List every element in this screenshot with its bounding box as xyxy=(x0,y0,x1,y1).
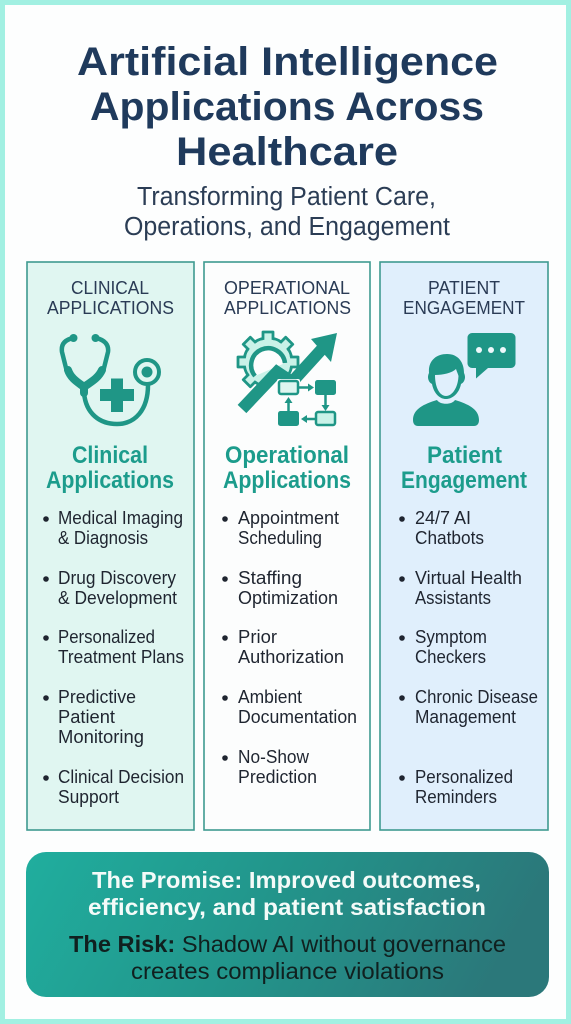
list: patient engagement items: Chatbots xyxy=(415,528,484,548)
subheading: clinical applications xyxy=(46,442,174,494)
panel header: operational: OPERATIONAL xyxy=(224,278,350,298)
panel header: operational xyxy=(224,278,351,318)
callout text: the risk: creates compliance violations xyxy=(131,958,444,984)
panel header: clinical: APPLICATIONS xyxy=(47,298,174,318)
list: operational items: Scheduling xyxy=(238,528,322,548)
list: clinical items: Patient xyxy=(58,707,115,727)
panel: clinical applications xyxy=(27,262,194,830)
list: operational items: Prior xyxy=(238,627,277,647)
list: patient engagement items xyxy=(399,508,538,807)
list: clinical items: Support xyxy=(58,787,119,807)
title xyxy=(77,40,498,174)
list: clinical items xyxy=(43,508,184,807)
list: operational items: Prediction xyxy=(238,767,317,787)
list: patient engagement items: Chronic Disease xyxy=(415,687,538,707)
panel header: patient engagement: PATIENT xyxy=(428,278,500,298)
list: operational items: Staffing xyxy=(238,568,302,588)
icon: stethoscope with cross xyxy=(62,334,159,424)
list: clinical items: Drug Discovery xyxy=(58,568,176,588)
subheading: operational applications: Operational xyxy=(225,442,349,469)
subtitle: Transforming Patient Care, xyxy=(137,183,436,211)
subheading: clinical applications: Clinical xyxy=(72,442,148,469)
panel: patient engagement xyxy=(380,262,548,830)
title: Applications Across xyxy=(90,85,484,129)
panel: operational applications xyxy=(204,262,370,830)
list: clinical items: & Diagnosis xyxy=(58,528,148,548)
list: operational items: Appointment xyxy=(238,508,339,528)
subheading: clinical applications: Applications xyxy=(46,467,174,494)
list: clinical items: Treatment Plans xyxy=(58,647,184,667)
list: operational items xyxy=(222,508,357,787)
list: patient engagement items: Checkers xyxy=(415,647,486,667)
list: clinical items: Monitoring xyxy=(58,727,144,747)
panel header: clinical xyxy=(47,278,174,318)
callout text: the promise xyxy=(88,867,486,920)
list: clinical items: & Development xyxy=(58,588,177,608)
icon: gear, growth arrow and flowchart xyxy=(238,332,337,426)
subheading: patient engagement: Patient xyxy=(427,442,502,469)
list: clinical items: Personalized xyxy=(58,627,155,647)
subtitle: Operations, and Engagement xyxy=(124,213,450,241)
list: operational items: Authorization xyxy=(238,647,344,667)
list: clinical items: Predictive xyxy=(58,687,136,707)
panel header: patient engagement xyxy=(403,278,525,318)
callout text: the risk: The Risk: Shadow AI without governance xyxy=(69,931,506,957)
list: operational items: Optimization xyxy=(238,588,338,608)
panel header: clinical: CLINICAL xyxy=(71,278,149,298)
icon: person with speech bubble xyxy=(413,333,516,426)
list: patient engagement items: Personalized xyxy=(415,767,513,787)
list: clinical items: Clinical Decision xyxy=(58,767,184,787)
subheading: operational applications: Applications xyxy=(223,467,351,494)
list: operational items: No-Show xyxy=(238,747,310,767)
list: patient engagement items: Management xyxy=(415,707,516,727)
list: patient engagement items: Assistants xyxy=(415,588,491,608)
list: operational items: Ambient xyxy=(238,687,302,707)
list: patient engagement items: Virtual Health xyxy=(415,568,522,588)
subheading: patient engagement: Engagement xyxy=(401,467,527,494)
panel header: patient engagement: ENGAGEMENT xyxy=(403,298,525,318)
callout text: the promise: The Promise: Improved outcomes, xyxy=(92,867,481,893)
list: patient engagement items: Reminders xyxy=(415,787,497,807)
list: patient engagement items: 24/7 AI xyxy=(415,508,471,528)
subheading: patient engagement xyxy=(401,442,527,494)
subheading: operational applications xyxy=(223,442,351,494)
panel header: operational: APPLICATIONS xyxy=(224,298,351,318)
callout text: the risk xyxy=(69,931,506,984)
title: Healthcare xyxy=(176,130,398,174)
list: operational items: Documentation xyxy=(238,707,357,727)
subtitle xyxy=(124,183,450,241)
list: patient engagement items: Symptom xyxy=(415,627,487,647)
title: Artificial Intelligence xyxy=(77,40,498,84)
callout: promise and risk xyxy=(26,852,549,997)
callout text: the promise: efficiency, and patient satisfaction xyxy=(88,894,486,920)
list: clinical items: Medical Imaging xyxy=(58,508,183,528)
